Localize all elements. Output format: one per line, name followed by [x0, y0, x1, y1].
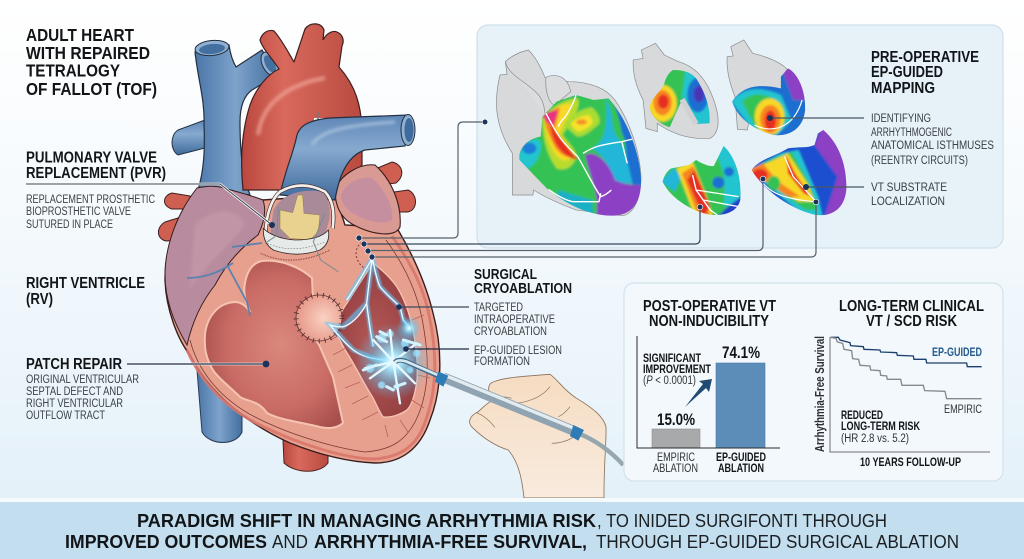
label: patch repair: PATCH REPAIR [26, 356, 122, 373]
label: pulmonary valve replacement: REPLACEMENT (PVR) [26, 165, 166, 182]
banner line 2 [65, 532, 959, 552]
value 74.1%: 74.1% [722, 343, 760, 362]
leader: lesion [403, 346, 469, 352]
cable [578, 433, 623, 465]
label: right ventricle: (RV) [26, 291, 53, 308]
label: significance: SIGNIFICANT [643, 353, 701, 365]
title [26, 25, 157, 99]
axis labels: ABLATION [653, 463, 698, 475]
text: isthmuses: (REENTRY CIRCUITS) [871, 155, 968, 167]
map: upper right heart [727, 40, 807, 137]
pulmonary artery [280, 114, 415, 200]
text: cryoablation targets [474, 302, 555, 338]
banner line 2: AND [272, 532, 308, 552]
map: cross-section heart [633, 43, 718, 139]
left pulmonary veins [158, 193, 190, 241]
heading: mapping: MAPPING [871, 80, 935, 97]
text: VT substrate: VT SUBSTRATE [871, 182, 947, 194]
label: surgical cryoablation [474, 267, 572, 297]
label: surgical cryoablation: SURGICAL [474, 267, 537, 283]
connectors from heart to maps [356, 119, 819, 260]
inferior vena cava [197, 370, 242, 442]
heart body [165, 190, 440, 463]
label: significance: IMPROVEMENT [643, 364, 711, 376]
text: lesion formation: FORMATION [474, 356, 530, 368]
heading: long-term: VT / SCD RISK [866, 313, 957, 330]
heading: non-inducibility: POST-OPERATIVE VT [643, 298, 776, 315]
cryoablation energy lines [330, 258, 432, 403]
curve: EP-guided [831, 337, 982, 367]
label: EP-guided: EP-GUIDED [932, 347, 982, 359]
left ventricle cavity [333, 263, 417, 417]
axis labels: EMPIRIC [657, 452, 695, 464]
heading: non-inducibility [643, 298, 776, 330]
panel: pre-operative EP-guided mapping [477, 25, 1003, 248]
chart: non-inducibility bars [637, 298, 780, 475]
title: OF FALLOT (TOF) [26, 79, 157, 99]
axis labels: ABLATION [718, 463, 764, 475]
title: WITH REPAIRED [26, 43, 150, 63]
text: isthmuses: IDENTIFYING [871, 113, 931, 125]
text: patch description: SEPTAL DEFECT AND [26, 386, 123, 398]
text: patch description: ORIGINAL VENTRICULAR [26, 374, 139, 386]
hand [470, 374, 606, 498]
right pulmonary veins [368, 162, 416, 212]
text: cryoablation targets: INTRAOPERATIVE [474, 314, 555, 326]
superior vena cava [172, 39, 283, 195]
ventricular septal patch [296, 295, 342, 341]
panel: outcomes charts [624, 283, 1003, 481]
left atrial appendage [335, 165, 400, 234]
label: surgical cryoablation: CRYOABLATION [474, 281, 572, 297]
text: patch description: RIGHT VENTRICULAR [26, 398, 123, 410]
label: right ventricle: RIGHT VENTRICLE [26, 275, 145, 292]
leader: isthmus [767, 115, 864, 121]
text: patch description [26, 374, 139, 422]
text: isthmuses [871, 113, 994, 167]
label: reduced risk: REDUCED [841, 410, 883, 422]
heading: mapping [871, 49, 979, 97]
descending aorta stub [283, 440, 328, 471]
text: valve description: SUTURED IN PLACE [26, 219, 113, 231]
valve chordae [187, 243, 262, 316]
chart: long-term survival [812, 298, 990, 469]
leader: patch repair [127, 361, 269, 367]
text: cryoablation targets: CRYOABLATION [474, 326, 547, 338]
prosthetic pulmonary valve [261, 185, 338, 272]
EP voltage maps [496, 40, 852, 223]
label: reduced risk [841, 410, 921, 445]
curve: empiric [831, 337, 982, 399]
leader: pulmonary valve [26, 184, 275, 228]
text: VT substrate [871, 182, 947, 208]
heading: non-inducibility: NON-INDUCIBILITY [649, 313, 769, 330]
label: reduced risk: (HR 2.8 vs. 5.2) [841, 433, 909, 445]
leader: substrate [803, 184, 864, 190]
label: significance: (P < 0.0001) [643, 375, 696, 387]
hand holding cryoprobe [395, 360, 623, 498]
heading: mapping: PRE-OPERATIVE [871, 49, 979, 66]
leader: cryoablation [396, 304, 469, 310]
heading: long-term: LONG-TERM CLINICAL [839, 298, 984, 315]
outer wall band [187, 236, 435, 459]
x axis label: 10 YEARS FOLLOW-UP [860, 457, 961, 469]
axis labels [653, 452, 766, 475]
bar: EP-guided [716, 363, 765, 448]
probe [395, 360, 584, 441]
label: pulmonary valve replacement [26, 150, 166, 182]
heading: mapping: EP-GUIDED [871, 64, 943, 81]
text: valve description: BIOPROSTHETIC VALVE [26, 206, 131, 218]
banner line 2: ARRHYTHMIA-FREE SURVIVAL, [314, 532, 587, 552]
title: TETRALOGY [26, 60, 120, 80]
banner line 1: , TO INIDED SURGIFONTI THROUGH [597, 511, 887, 531]
right atrium purple surface [165, 186, 265, 345]
text: lesion formation: EP-GUIDED LESION [474, 345, 562, 357]
map: large heart [496, 50, 650, 223]
heading: long-term [839, 298, 984, 330]
value 15.0%: 15.0% [657, 410, 695, 429]
label: reduced risk: LONG-TERM RISK [841, 421, 921, 433]
y axis label: Arrhythmia-Free Survival [812, 336, 827, 452]
text: lesion formation [474, 345, 562, 368]
aorta [242, 24, 362, 190]
text: patch description: OUTFLOW TRACT [26, 410, 105, 422]
map: lower middle [662, 146, 740, 215]
banner line 2: IMPROVED OUTCOMES [65, 532, 267, 552]
suture line [356, 242, 364, 268]
text: isthmuses: ANATOMICAL ISTHMUSES [871, 140, 994, 152]
right ventricle cavity [205, 261, 343, 428]
bottom banner [0, 498, 1024, 559]
axes [830, 337, 990, 452]
banner line 1 [137, 511, 887, 531]
banner line 1: PARADIGM SHIFT IN MANAGING ARRHYTHMIA RISK [137, 511, 596, 531]
text: valve description: REPLACEMENT PROSTHETIC [26, 194, 155, 206]
label: right ventricle [26, 275, 145, 308]
wall striations [330, 315, 430, 437]
text: isthmuses: ARRHYTHMOGENIC [871, 127, 952, 139]
label: significance [643, 353, 711, 387]
text: valve description [26, 194, 155, 231]
title: ADULT HEART [26, 25, 134, 45]
arrow [685, 379, 712, 407]
heart illustration [158, 24, 440, 471]
bar: empiric [652, 429, 700, 448]
label: empiric: EMPIRIC [944, 404, 982, 416]
text: VT substrate: LOCALIZATION [871, 196, 945, 208]
label: pulmonary valve replacement: PULMONARY VALVE [26, 150, 157, 166]
banner line 2: THROUGH EP-GUIDED SURGICAL ABLATION [596, 532, 959, 552]
map: lower right [752, 130, 846, 216]
axis labels: EP-GUIDED [716, 452, 766, 464]
text: cryoablation targets: TARGETED [474, 302, 523, 314]
axes [637, 336, 780, 448]
